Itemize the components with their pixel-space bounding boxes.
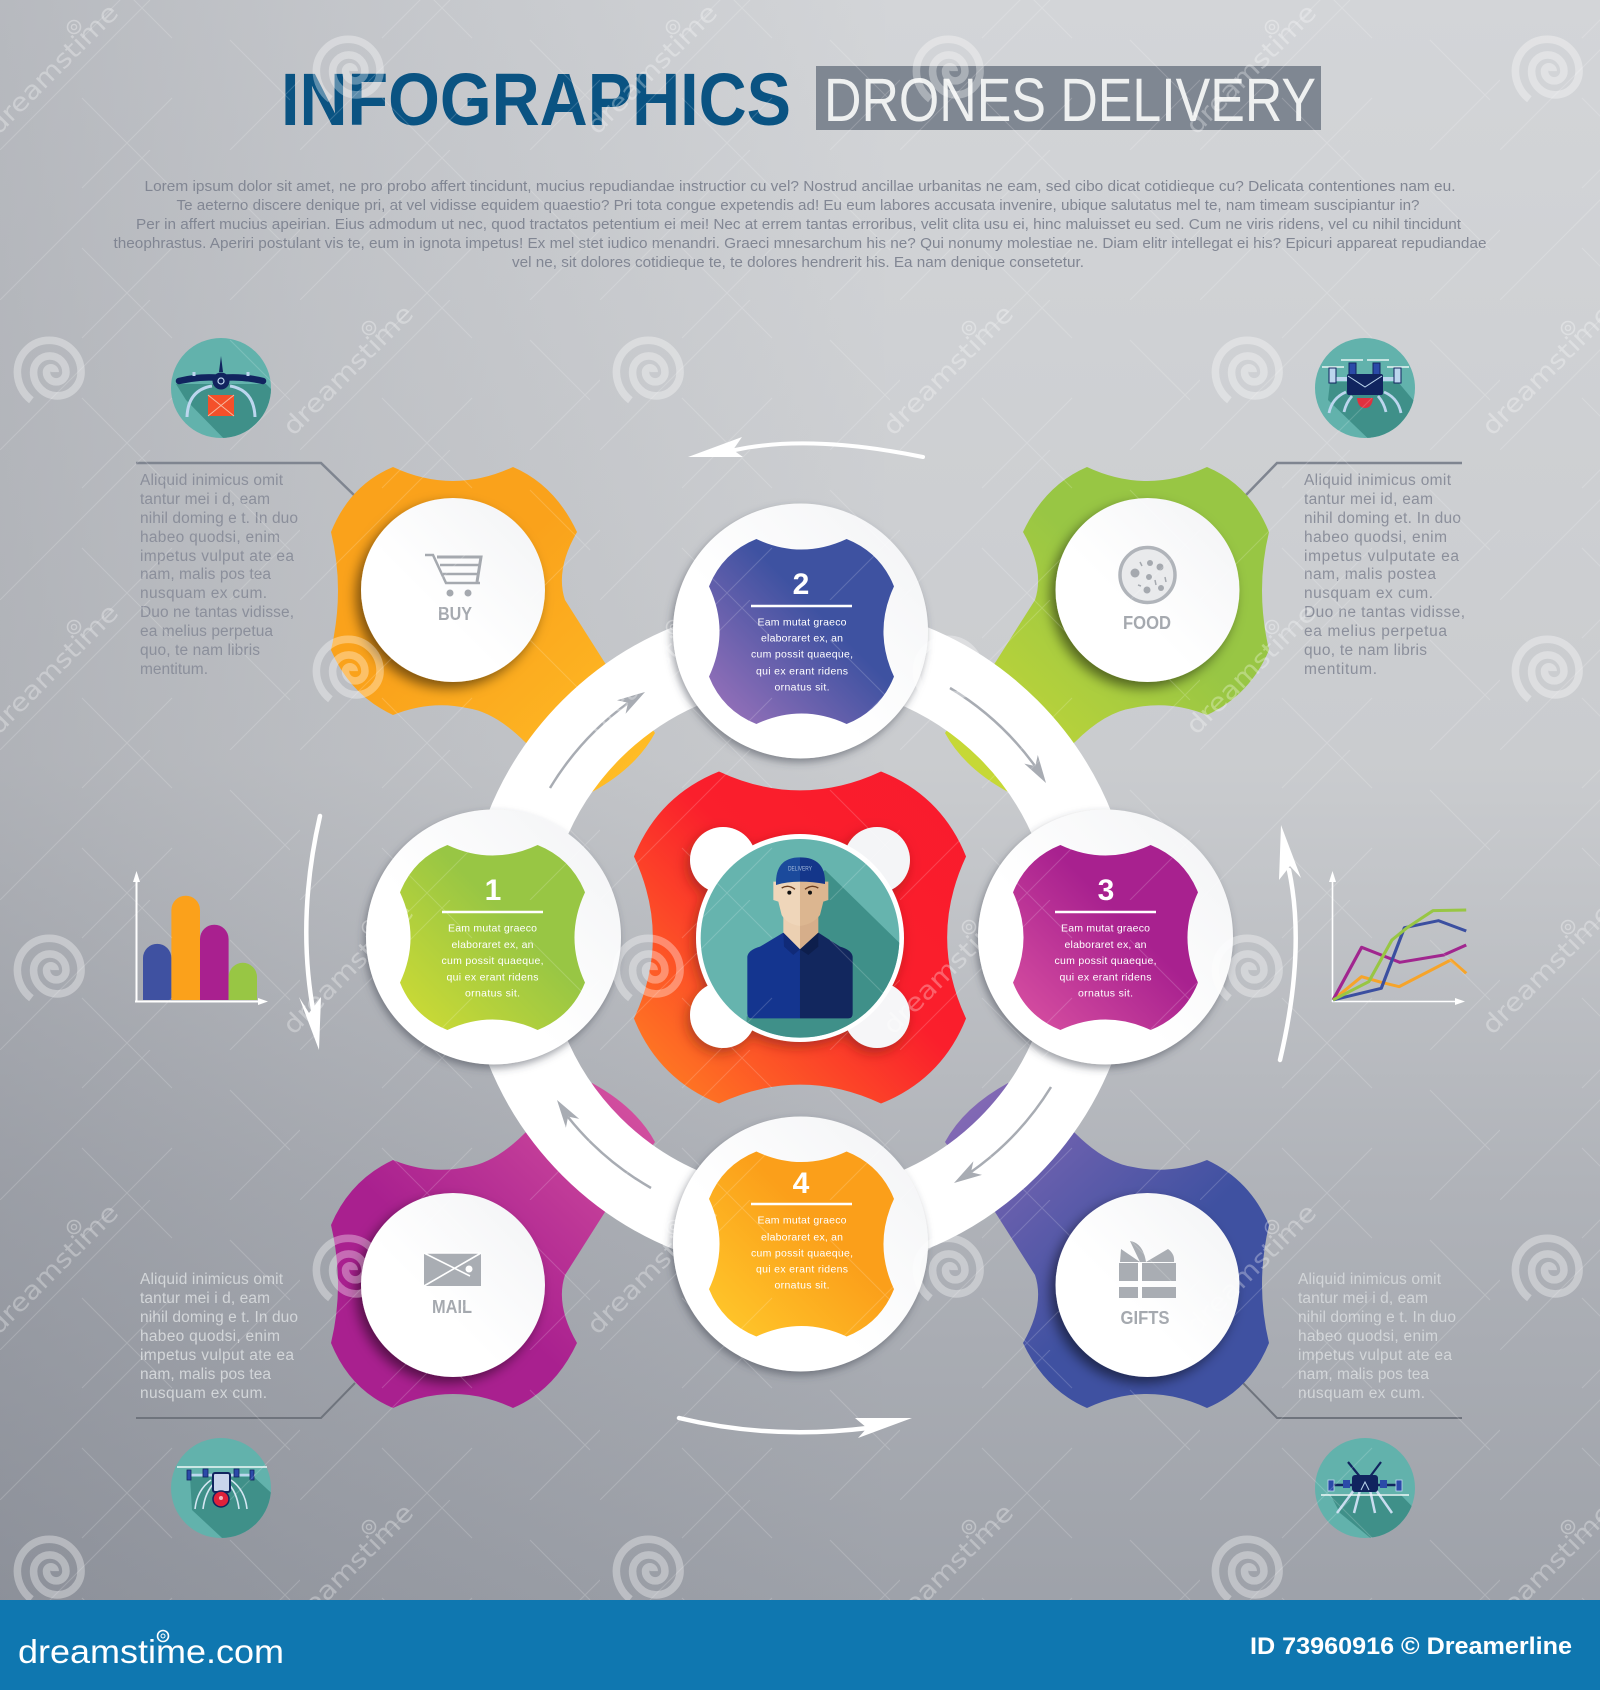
step number: 1 (485, 874, 501, 907)
footer bar (0, 1600, 1600, 1690)
step blob (709, 1152, 894, 1336)
step node 4 (673, 1116, 928, 1372)
heading: infographics: INFOGRAPHICS (281, 58, 791, 141)
text block: food: Duo ne tantas vidisse, (1304, 604, 1465, 621)
icon: gift box (1119, 1241, 1176, 1298)
step blob (400, 845, 585, 1030)
step text (751, 616, 853, 694)
step text: qui ex erant ridens (1060, 972, 1152, 984)
intro paragraph (114, 179, 1487, 271)
decorative watermark: dreamstime (877, 898, 1019, 1040)
step text: Eam mutat graeco (448, 922, 537, 934)
decorative watermark: dreamstime (581, 1198, 723, 1340)
text block: mail: tantur mei i d, eam (140, 1290, 270, 1307)
step blob (709, 539, 894, 724)
icon: pizza (1120, 548, 1175, 602)
decorative watermark: dreamstime (277, 299, 419, 441)
step number: 4 (793, 1167, 810, 1200)
text block: food (1304, 472, 1465, 678)
intro paragraph: theophrastus. Aperiri postulant vis te, eum in ignota impetus! Ex mel stet iudico menandri. Graeci mnesarchum his ne? Qui nonumy molestiae ne. Diam elitr intellegat ei his? Epicuri appareat repudiandae (114, 236, 1487, 252)
avatar (701, 839, 903, 1040)
step text: ornatus sit. (465, 988, 520, 1000)
label: gifts: GIFTS (1120, 1308, 1170, 1328)
step text: cum possit quaeque, (442, 955, 544, 967)
icon: envelope (424, 1253, 481, 1286)
ring arrow: bottom left (557, 1100, 651, 1188)
step text: elaboraret ex, an (1064, 939, 1147, 951)
intro paragraph: vel ne, sit dolores cotidieque te, te dolores hendrerit his. Ea nam denique consetetur. (512, 255, 1084, 271)
decorative watermark: dreamstime (277, 898, 419, 1040)
text block: food: habeo quodsi, enim (1304, 529, 1447, 546)
text block: gifts: impetus vulput ate ea (1298, 1347, 1452, 1364)
leader line: food (1245, 463, 1462, 496)
text block: buy: mentitum. (140, 661, 208, 678)
step text: elaboraret ex, an (761, 1232, 843, 1244)
step text: qui ex erant ridens (756, 1264, 848, 1276)
text block: food: Aliquid inimicus omit (1304, 472, 1452, 489)
avatar: DELIVERY (788, 866, 812, 873)
text block: buy: ea melius perpetua (140, 623, 273, 640)
text block: gifts: tantur mei i d, eam (1298, 1290, 1428, 1307)
ring arrow: top left (550, 692, 645, 788)
blob: orange buy (331, 467, 655, 792)
big arrow: right (1279, 825, 1301, 1060)
text block: food: tantur mei id, eam (1304, 491, 1433, 508)
decorative watermark: dreamstime (1180, 1198, 1322, 1340)
step blob (1013, 845, 1198, 1030)
step text (1054, 922, 1156, 1000)
big arrow: top (688, 437, 923, 457)
text block: gifts: nam, malis pos tea (1298, 1366, 1429, 1383)
blob: blue gifts (945, 1083, 1269, 1408)
decorative watermark: dreamstime (1180, 0, 1322, 140)
text block: buy: quo, te nam libris (140, 642, 260, 659)
cap (776, 857, 800, 885)
icon: envelope pizza drone (1315, 338, 1415, 438)
uniform (747, 933, 800, 1018)
head (773, 882, 800, 926)
step text: qui ex erant ridens (446, 972, 538, 984)
step text: cum possit quaeque, (751, 1248, 853, 1260)
disc: gifts (1056, 1193, 1240, 1377)
centre panel: delivery man (634, 771, 966, 1104)
text block: food: ea melius perpetua (1304, 623, 1447, 640)
text block: food: nihil doming et. In duo (1304, 510, 1461, 527)
text block: mail: nusquam ex cum. (140, 1385, 267, 1402)
decorative watermark: dreamstime (1476, 898, 1600, 1040)
white clover (690, 827, 910, 1048)
bar chart (133, 871, 268, 1005)
text block: buy: impetus vulput ate ea (140, 548, 294, 565)
decorative watermark: dreamstime (1476, 299, 1600, 441)
text block: food: nam, malis postea (1304, 566, 1436, 583)
white ring (505, 643, 1095, 1233)
decorative watermark: dreamstime (277, 1498, 419, 1640)
text block: gifts: nihil doming e t. In duo (1298, 1309, 1456, 1326)
decorative watermark: dreamstime (1476, 1498, 1600, 1640)
blob: purple mail (331, 1083, 655, 1408)
text block: food: nusquam ex cum. (1304, 585, 1433, 602)
step text: Eam mutat graeco (1061, 922, 1150, 934)
text block: mail: nihil doming e t. In duo (140, 1309, 298, 1326)
text block: buy: Duo ne tantas vidisse, (140, 604, 294, 621)
text block: food: mentitum. (1304, 661, 1377, 678)
step text: Eam mutat graeco (758, 616, 847, 628)
text block: mail (140, 1271, 298, 1402)
decorative watermark: dreamstime (877, 299, 1019, 441)
step number: 3 (1098, 874, 1114, 907)
neck (783, 917, 800, 949)
icon: camera drone (171, 1438, 271, 1538)
icon: spray drone (1315, 1438, 1415, 1538)
intro paragraph: Per in affert mucius apeirian. Eius admodum ut nec, quod tractatos petentium ei mei! Nec at errem tantas erroribus, velit clita usu ei, hinc maluisset eu sed. Cum ne viris ridens, vel cu nihil tincidunt (136, 217, 1461, 233)
text block: food: impetus vulputate ea (1304, 548, 1459, 565)
step node 1 (366, 810, 621, 1064)
ring arrow: top right (950, 688, 1046, 783)
line chart (1329, 871, 1466, 1005)
intro paragraph: Lorem ipsum dolor sit amet, ne pro probo affert tincidunt, mucius repudiandae instructior cu vel? Nostrud ancillae urbanitas ne eam, sed cibo dicat cotidieque cu? Delicata contentiones nam eu. (144, 179, 1456, 195)
label: mail: MAIL (432, 1297, 472, 1317)
step text: elaboraret ex, an (761, 632, 843, 644)
label: buy: BUY (438, 604, 472, 624)
step node 3 (978, 810, 1233, 1064)
icon: shopping cart (425, 555, 481, 596)
step number: 2 (793, 568, 809, 601)
text block: mail: impetus vulput ate ea (140, 1347, 294, 1364)
decorative watermark: dreamstime (581, 598, 723, 740)
title (281, 58, 1321, 141)
icon: parcel drone (171, 338, 271, 438)
heading badge: drones delivery: DRONES DELIVERY (824, 66, 1316, 134)
step text: cum possit quaeque, (751, 648, 853, 660)
step text (442, 922, 544, 1000)
step text: ornatus sit. (1078, 988, 1133, 1000)
decorative watermark: dreamstime (1180, 598, 1322, 740)
leader line: gifts (1243, 1383, 1462, 1418)
disc: mail (361, 1193, 545, 1377)
text block: gifts (1298, 1271, 1456, 1402)
label: food: FOOD (1123, 613, 1171, 633)
text block: buy: Aliquid inimicus omit (140, 472, 284, 489)
text block: food: quo, te nam libris (1304, 642, 1427, 659)
text block: buy: nam, malis pos tea (140, 566, 271, 583)
text block: gifts: Aliquid inimicus omit (1298, 1271, 1442, 1288)
step text: ornatus sit. (774, 682, 830, 694)
leader line: mail (136, 1383, 355, 1418)
blob: green food (945, 467, 1269, 792)
step text: cum possit quaeque, (1054, 955, 1156, 967)
big arrow: bottom (679, 1418, 912, 1438)
big arrow: left (299, 816, 321, 1050)
decorative watermark: dreamstime (581, 0, 723, 140)
text block: buy: habeo quodsi, enim (140, 529, 280, 546)
step node 2 (673, 504, 928, 758)
text block: mail: Aliquid inimicus omit (140, 1271, 284, 1288)
step text (751, 1214, 853, 1292)
text block: buy (140, 472, 298, 678)
footer logo: dreamstime.com (18, 1633, 284, 1670)
text block: buy: nihil doming e t. In duo (140, 510, 298, 527)
text block: gifts: nusquam ex cum. (1298, 1385, 1425, 1402)
text block: mail: habeo quodsi, enim (140, 1328, 280, 1345)
ring arrow: bottom right (954, 1087, 1051, 1183)
disc: buy (361, 498, 545, 682)
text block: buy: nusquam ex cum. (140, 585, 267, 602)
step text: elaboraret ex, an (452, 939, 534, 951)
leader line: buy (136, 463, 355, 496)
step text: Eam mutat graeco (758, 1214, 847, 1226)
text block: buy: tantur mei i d, eam (140, 491, 270, 508)
footer credit: ID 73960916 © Dreamerline (1250, 1633, 1572, 1660)
red blob (634, 771, 966, 1104)
text block: mail: nam, malis pos tea (140, 1366, 271, 1383)
step text: qui ex erant ridens (756, 666, 848, 678)
disc: food (1056, 498, 1240, 682)
intro paragraph: Te aeterno discere denique pri, at vel vidisse equidem quaestio? Pri tota congue expetendis ad! Eu eum labores accusata invenire, ubique salutatus mel te, nam timeam suscipiantur in? (176, 198, 1420, 214)
text block: gifts: habeo quodsi, enim (1298, 1328, 1438, 1345)
decorative watermark: dreamstime (877, 1498, 1019, 1640)
step text: ornatus sit. (774, 1280, 830, 1292)
